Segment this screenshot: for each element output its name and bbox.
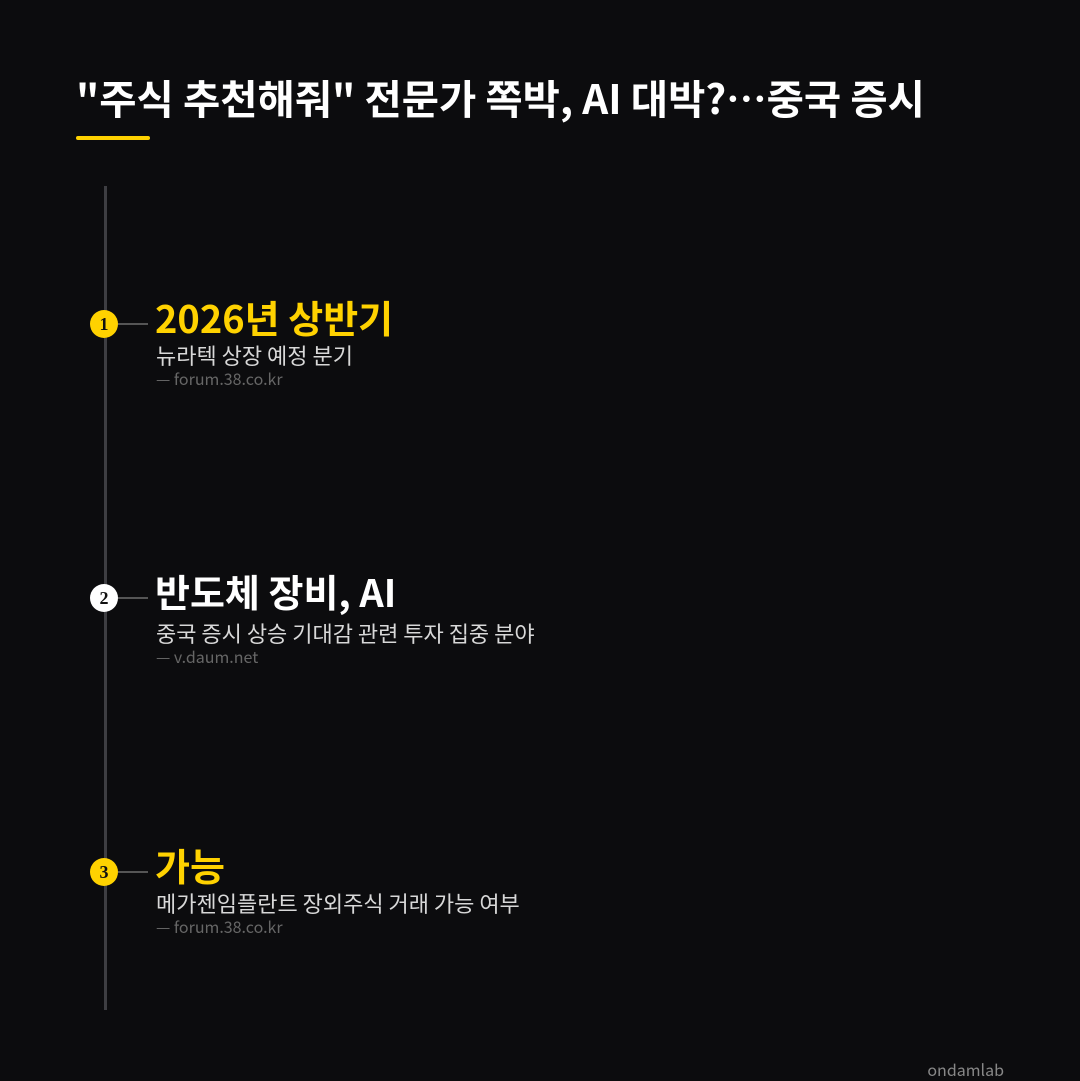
heading 2: 반도체 장비, AI — [155, 563, 396, 618]
item 1 — [90, 289, 393, 390]
heading 1: 2026년 상반기 — [155, 289, 393, 344]
badge 3 — [90, 858, 118, 886]
item 2 — [90, 563, 535, 668]
item 3 — [90, 837, 520, 938]
title: "주식 추천해줘" 전문가 쪽박, AI 대박?…중국 증시 — [76, 67, 925, 126]
badge 3: 3 — [100, 862, 108, 882]
timeline line — [104, 186, 107, 1010]
footer brand: ondamlab — [927, 1057, 1004, 1081]
source 1: — forum.38.co.kr — [156, 366, 283, 390]
description 1: 뉴라텍 상장 예정 분기 — [156, 339, 353, 371]
source 2: — v.daum.net — [156, 644, 258, 668]
badge 2 — [90, 584, 118, 612]
description 3: 메가젠임플란트 장외주식 거래 가능 여부 — [156, 887, 520, 919]
badge 1: 1 — [100, 314, 108, 334]
source 3: — forum.38.co.kr — [156, 914, 283, 938]
badge 1 — [90, 310, 118, 338]
heading 3: 가능 — [155, 837, 225, 892]
badge 2: 2 — [100, 588, 108, 608]
description 2: 중국 증시 상승 기대감 관련 투자 집중 분야 — [156, 617, 535, 649]
title underline — [76, 136, 150, 140]
